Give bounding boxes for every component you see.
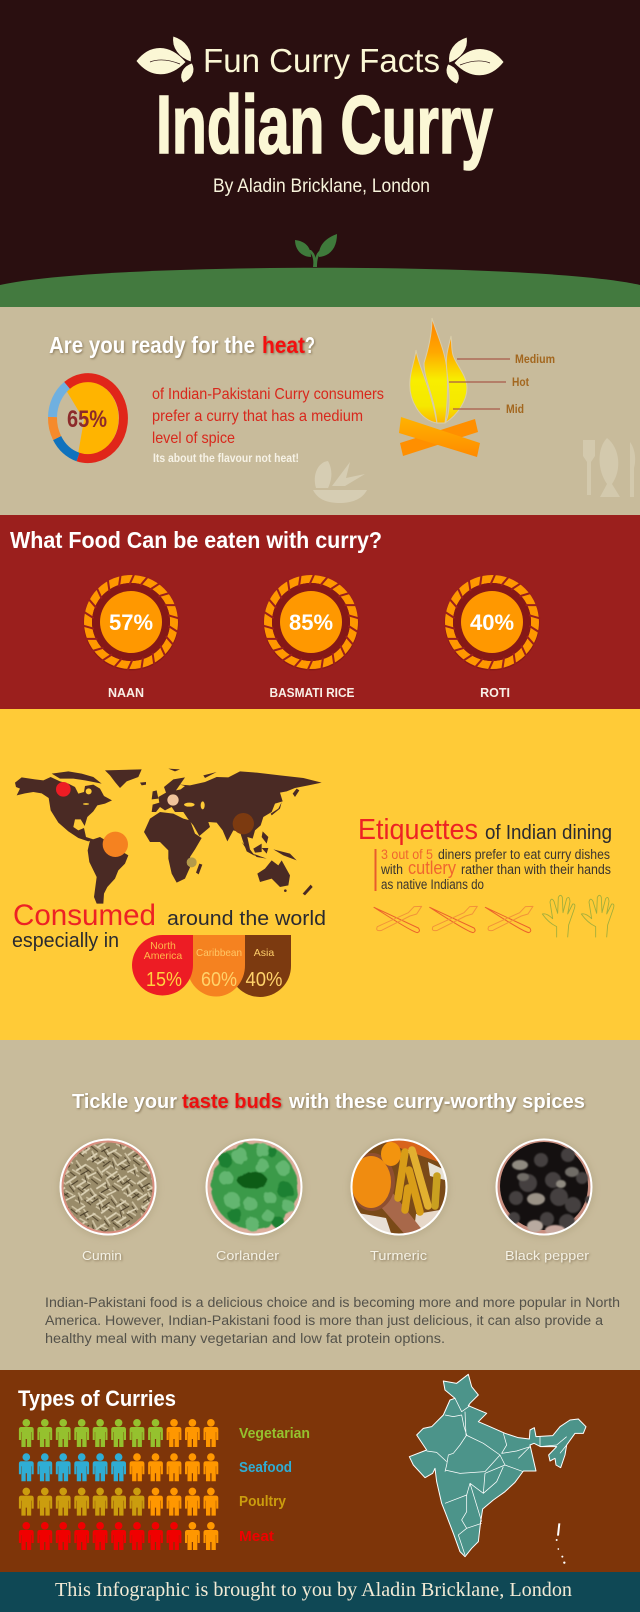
stat: naan: NAAN	[108, 686, 144, 700]
spice labels: Cumin	[82, 1248, 122, 1263]
spice labels: Turmeric	[370, 1248, 428, 1263]
stat: basmati rice	[262, 574, 360, 700]
heading: taste buds	[182, 1091, 282, 1113]
heading	[72, 1091, 585, 1113]
photo: turmeric	[348, 1137, 450, 1240]
text block: paragraph: Indian-Pakistani food is a delicious choice and is becoming more and more popular in North	[45, 1295, 620, 1310]
icon: bowl watermark	[313, 461, 367, 503]
stat: roti	[443, 574, 541, 700]
icon: left leaves	[136, 36, 194, 83]
india map	[409, 1374, 586, 1564]
icons: cutlery and hands	[374, 895, 614, 937]
donut chart 65%	[52, 378, 123, 459]
spice labels: Black pepper	[505, 1248, 590, 1263]
heading: Tickle your	[72, 1091, 177, 1113]
text block: etiquette: diners prefer to eat curry dishes	[438, 847, 610, 862]
stat: roti: 40%	[470, 610, 514, 635]
heading: with these curry-worthy spices	[288, 1091, 585, 1113]
drop: north america: North	[150, 940, 176, 952]
heading: What Food Can be eaten with curry?	[10, 527, 382, 553]
panel: heat	[0, 307, 640, 515]
panel: footer	[0, 1572, 640, 1612]
flame legend: Mid	[506, 404, 524, 416]
text block: etiquette	[374, 847, 611, 892]
stat: naan: 57%	[109, 610, 153, 635]
donut chart 65%: 65%	[67, 406, 107, 433]
stat: basmati rice: BASMATI RICE	[270, 686, 354, 700]
legend labels	[239, 1426, 310, 1545]
flame legend: Hot	[512, 377, 529, 389]
note: Its about the flavour not heat!	[153, 453, 299, 465]
text block: paragraph: healthy meal with many vegetarian and low fat protein options.	[45, 1331, 445, 1346]
text block: etiquette: with	[380, 862, 403, 877]
text block: heat stat: level of spice	[152, 430, 235, 447]
pictogram row: vegetarian	[19, 1419, 218, 1447]
heading: ?	[305, 332, 315, 358]
photo: cumin	[57, 1137, 159, 1239]
stat: naan	[82, 574, 180, 700]
stat: roti: ROTI	[480, 686, 510, 700]
drop: caribbean: 60%	[201, 969, 237, 991]
heading: etiquettes: of Indian dining	[485, 822, 612, 844]
world map	[15, 769, 322, 904]
spice labels: Corlander	[216, 1248, 280, 1263]
heading: Types of Curries	[18, 1386, 176, 1411]
text block: heat stat: of Indian-Pakistani Curry consumers	[152, 386, 384, 403]
drop: north america: America	[144, 950, 182, 962]
legend labels: Vegetarian	[239, 1426, 310, 1442]
drop: north america: 15%	[146, 969, 182, 991]
heading: etiquettes	[358, 814, 612, 846]
drop: asia: Asia	[254, 947, 274, 959]
map markers	[56, 782, 254, 867]
pictogram row: seafood	[19, 1453, 218, 1481]
text block: etiquette: 3 out of 5	[381, 847, 433, 862]
icon: cutlery and fish watermark	[583, 438, 635, 497]
photo: black pepper	[493, 1137, 595, 1239]
text block: etiquette: rather than with their hands	[461, 862, 611, 877]
icon: sprout	[295, 234, 337, 267]
heading: consumed around the world: Consumed	[13, 899, 156, 932]
panel: foods with curry	[0, 515, 640, 709]
panel: header	[0, 0, 640, 307]
legend labels: Meat	[239, 1529, 274, 1545]
title: indian curry: Indian Curry	[156, 78, 493, 171]
drop: north america	[132, 935, 193, 996]
panel: world and etiquette	[0, 709, 640, 1040]
stat: basmati rice: 85%	[289, 610, 333, 635]
pictogram row: poultry	[19, 1488, 218, 1516]
text block: heat stat: prefer a curry that has a medium	[152, 408, 363, 425]
drop: caribbean: Caribbean	[196, 947, 242, 959]
flame legend	[449, 354, 555, 416]
heading: consumed around the world: especially in	[12, 930, 119, 952]
legend labels: Poultry	[239, 1494, 286, 1510]
text block: etiquette: as native Indians do	[381, 877, 484, 892]
drop: asia	[229, 935, 291, 997]
title: fun curry facts: Fun Curry Facts	[203, 42, 440, 79]
drop: caribbean	[187, 935, 245, 997]
text block: etiquette: cutlery	[408, 858, 456, 878]
legend labels: Seafood	[239, 1460, 292, 1476]
text block: heat stat	[152, 386, 384, 447]
panel: types of curries	[0, 1370, 640, 1572]
heading: consumed around the world: around the world	[167, 908, 326, 930]
photo: coriander	[203, 1137, 305, 1239]
hill	[0, 268, 640, 307]
icon: right leaves	[446, 37, 504, 84]
heading: etiquettes: Etiquettes	[358, 814, 478, 846]
text block: paragraph	[45, 1295, 620, 1346]
pictogram row: meat	[19, 1522, 218, 1550]
subtitle: By Aladin Bricklane, London	[213, 176, 430, 197]
heading: Are you ready for the	[49, 332, 255, 358]
footer text: This Infographic is brought to you by Aladin Bricklane, London	[55, 1579, 572, 1601]
drop: asia: 40%	[246, 969, 283, 991]
andaman islands	[556, 1523, 565, 1564]
heading: heat	[262, 332, 305, 358]
flame legend: Medium	[515, 354, 555, 366]
spice labels	[82, 1248, 590, 1263]
panel: spices	[45, 1093, 620, 1346]
heading: consumed around the world	[12, 899, 326, 952]
text block: paragraph: America. However, Indian-Pakistani food is more than just delicious, it can also provide a	[45, 1313, 604, 1328]
icon: campfire	[399, 318, 480, 457]
